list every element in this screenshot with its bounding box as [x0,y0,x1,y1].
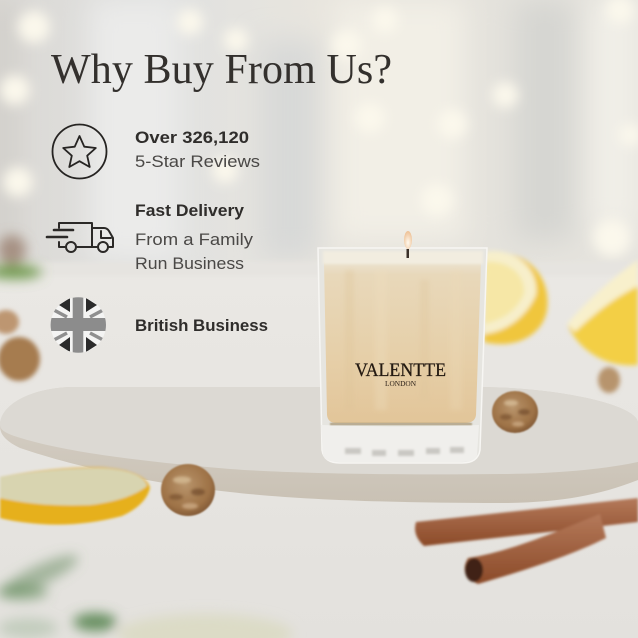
candle sub brand: LONDON [385,379,417,388]
candle wax top [323,251,483,264]
dried lemon slice [0,467,150,525]
text: British Business: British Business [135,317,268,335]
title: Why Buy From Us? [51,47,392,93]
walnut front [161,464,215,516]
candle glass [318,248,487,463]
lemon: right [567,260,638,365]
icon: delivery truck [47,223,113,252]
candle flame [404,231,412,249]
walnut on tray [492,391,538,433]
candle wax streaks [345,270,462,410]
table surface [0,262,638,638]
icon: British flag [50,297,107,353]
delivery subtext line one: From a Family [135,230,254,249]
text: fast delivery [135,202,254,273]
delivery heading: Fast Delivery [135,202,245,220]
icon: star in circle [52,124,106,178]
delivery subtext line two: Run Business [135,254,244,273]
candle base highlight [345,447,464,456]
background: blurred wall with bokeh lights [0,0,638,280]
candle wax [324,262,481,423]
candle wax shadow line [330,423,472,425]
reviews heading: Over 326,120 [135,129,249,147]
candle [318,231,487,463]
nuts in background [0,310,620,393]
candle brand: VALENTTE [355,360,446,381]
reviews subtext: 5-Star Reviews [135,153,260,171]
blurred greenery front [0,548,293,638]
tray [0,387,638,503]
text: reviews [135,129,260,171]
lemon: back center [484,251,548,344]
blurred greenery left [0,235,42,279]
cinnamon sticks [415,498,638,584]
candle wick [406,249,409,258]
candle base glass [321,425,479,462]
